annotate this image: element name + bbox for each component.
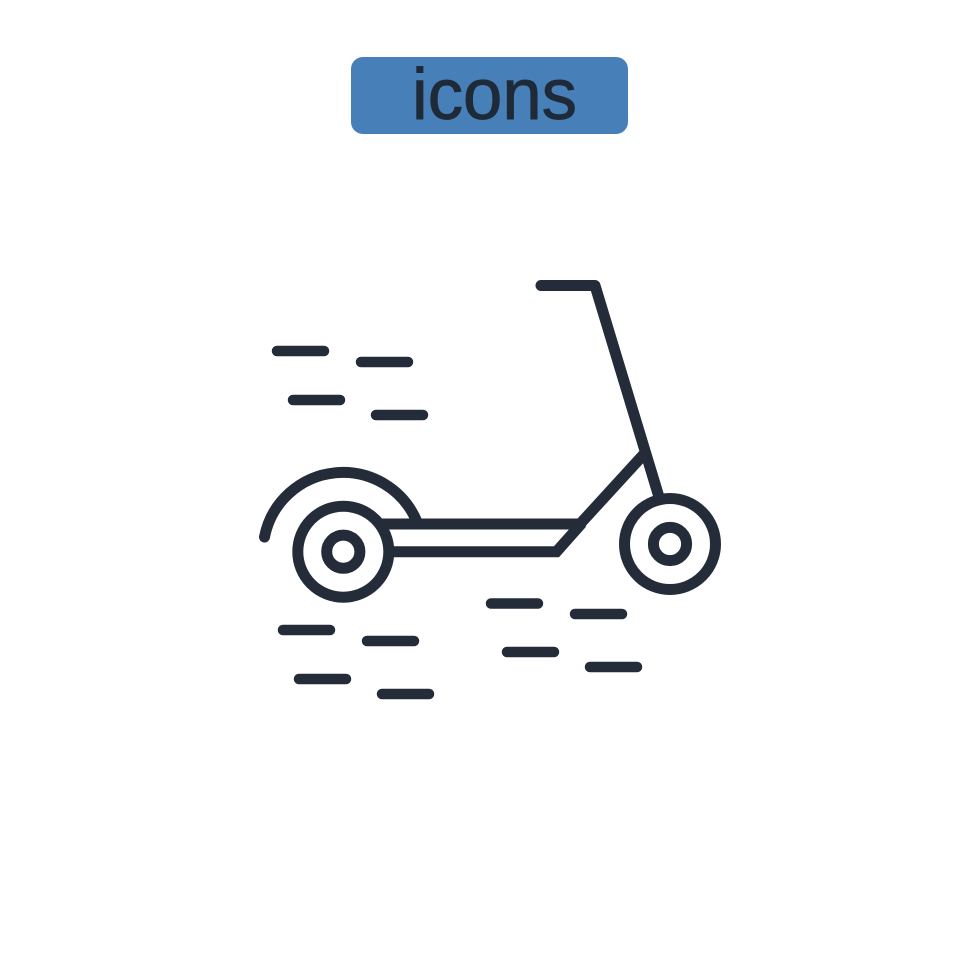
rear wheel [298, 506, 389, 597]
deck and neck [381, 453, 645, 552]
speed lines: lower right [491, 604, 637, 667]
heading text: icons [412, 55, 577, 135]
speed lines: upper left [277, 351, 423, 415]
front wheel [624, 498, 716, 590]
handlebar and stem [541, 286, 659, 497]
speed lines: lower left [283, 630, 429, 694]
rear fender [264, 472, 417, 537]
badge: icons heading [351, 55, 628, 135]
badge background [351, 57, 628, 134]
icon: kick scooter [264, 286, 716, 694]
